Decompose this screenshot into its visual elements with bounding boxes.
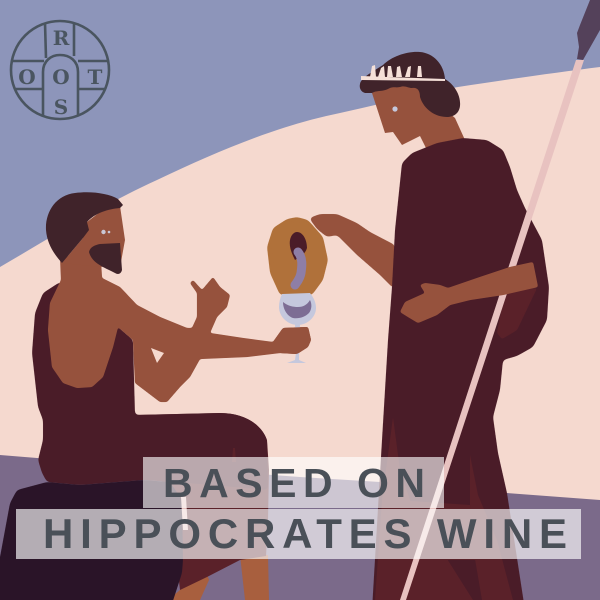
background: purple ground <box>0 455 600 600</box>
man's body and arms <box>48 255 311 402</box>
logo: ROOTS <box>11 21 109 119</box>
figure: seated man <box>0 192 311 600</box>
spear head <box>577 0 600 60</box>
woman's pouring arm <box>309 214 395 290</box>
robe shadow under arm <box>497 288 537 339</box>
logo line work <box>11 21 109 119</box>
wine in glass <box>283 300 311 318</box>
logo letters: S <box>54 95 68 119</box>
heading line one: BASED ON <box>163 460 425 506</box>
man's eye <box>101 230 110 234</box>
logo letters: R <box>53 26 70 50</box>
man's legs <box>168 555 269 600</box>
jug opening <box>290 232 307 260</box>
jug body <box>267 217 328 295</box>
glass stem and base <box>287 324 306 363</box>
man's hand on glass <box>273 327 311 354</box>
man's face <box>62 206 125 267</box>
banner box top <box>143 457 444 508</box>
robe folds <box>375 417 513 600</box>
man's hair <box>46 192 123 263</box>
logo letters: O <box>52 65 70 89</box>
woman's resting arm <box>400 262 538 323</box>
text banner: BASED ON <box>143 457 444 508</box>
woman's neck and face <box>372 80 465 150</box>
glass bowl <box>279 293 316 325</box>
woman's hair <box>360 52 460 117</box>
heading line two: HIPPOCRATES WINE <box>43 510 567 557</box>
man's skirt <box>135 413 269 590</box>
man's beard <box>89 243 122 274</box>
wine jug <box>267 217 328 295</box>
woman's earring <box>392 106 398 112</box>
wine stream <box>295 252 302 285</box>
man's dress <box>32 282 268 490</box>
logo letters: O <box>18 65 36 89</box>
woman's robe <box>372 138 549 600</box>
spear <box>400 60 584 600</box>
figure: standing woman <box>309 0 600 600</box>
logo letters <box>18 26 103 119</box>
stool <box>0 480 183 600</box>
text banner: HIPPOCRATES WINE <box>16 509 581 559</box>
stool highlight <box>181 497 188 530</box>
skirt fold <box>232 448 236 462</box>
wine glass <box>273 293 316 363</box>
logo letters: T <box>88 65 103 89</box>
tiara <box>361 65 445 81</box>
banner box bottom <box>16 509 581 559</box>
gap between man's arms <box>151 348 164 363</box>
